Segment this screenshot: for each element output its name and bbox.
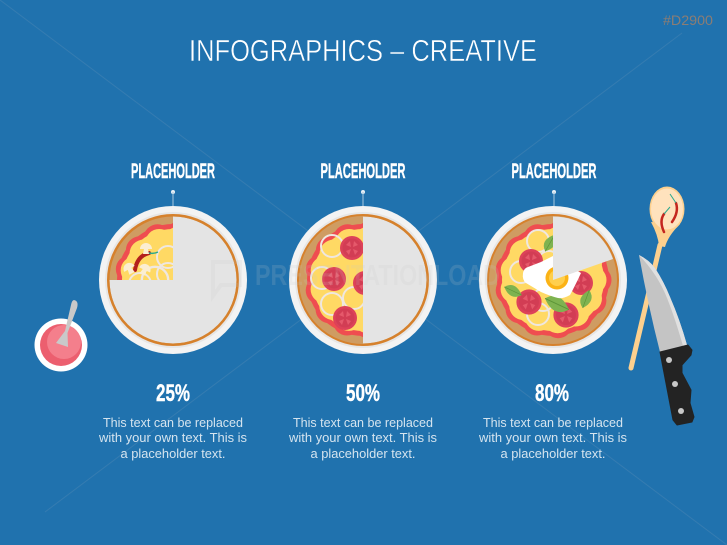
icon: knife [639, 255, 694, 425]
pizza chart 80% [479, 206, 627, 354]
icon: wooden spoon [631, 186, 684, 368]
column 2: 50% [288, 160, 437, 461]
heading 3: PLACEHOLDER [512, 160, 596, 183]
column 1: 25% [98, 160, 247, 461]
percent 1: 25% [156, 380, 190, 407]
heading 2: PLACEHOLDER [320, 160, 406, 183]
title: INFOGRAPHICS – CREATIVE [189, 34, 537, 68]
pointer 1 [171, 190, 175, 207]
pizza chart 25% [99, 206, 247, 354]
heading 1: PLACEHOLDER [131, 160, 215, 183]
watermark [213, 260, 500, 296]
pizza chart 50% [289, 206, 437, 354]
description 3: a placeholder text. [500, 446, 606, 461]
description 1: a placeholder text. [120, 446, 226, 461]
pointer 3 [552, 190, 556, 207]
description 2: a placeholder text. [310, 446, 416, 461]
color code tag: #D2900 [663, 13, 713, 28]
description 3 [478, 415, 627, 461]
percent 3: 80% [535, 380, 569, 407]
description 1: with your own text. This is [98, 430, 247, 445]
chart overlay [110, 216, 236, 344]
watermark: PRESENTATIONLOAD [255, 260, 500, 292]
chart overlay [363, 216, 426, 344]
pointer 2 [361, 190, 365, 207]
icon: sauce bowl [34, 300, 88, 372]
description 2 [288, 415, 437, 461]
chart overlay [553, 216, 613, 280]
description 2: This text can be replaced [293, 415, 433, 430]
description 3: This text can be replaced [483, 415, 623, 430]
percent 2: 50% [346, 380, 380, 407]
description 3: with your own text. This is [478, 430, 627, 445]
description 2: with your own text. This is [288, 430, 437, 445]
description 1: This text can be replaced [103, 415, 243, 430]
column 3: 80% [478, 160, 627, 461]
fried egg [523, 256, 581, 298]
description 1 [98, 415, 247, 461]
